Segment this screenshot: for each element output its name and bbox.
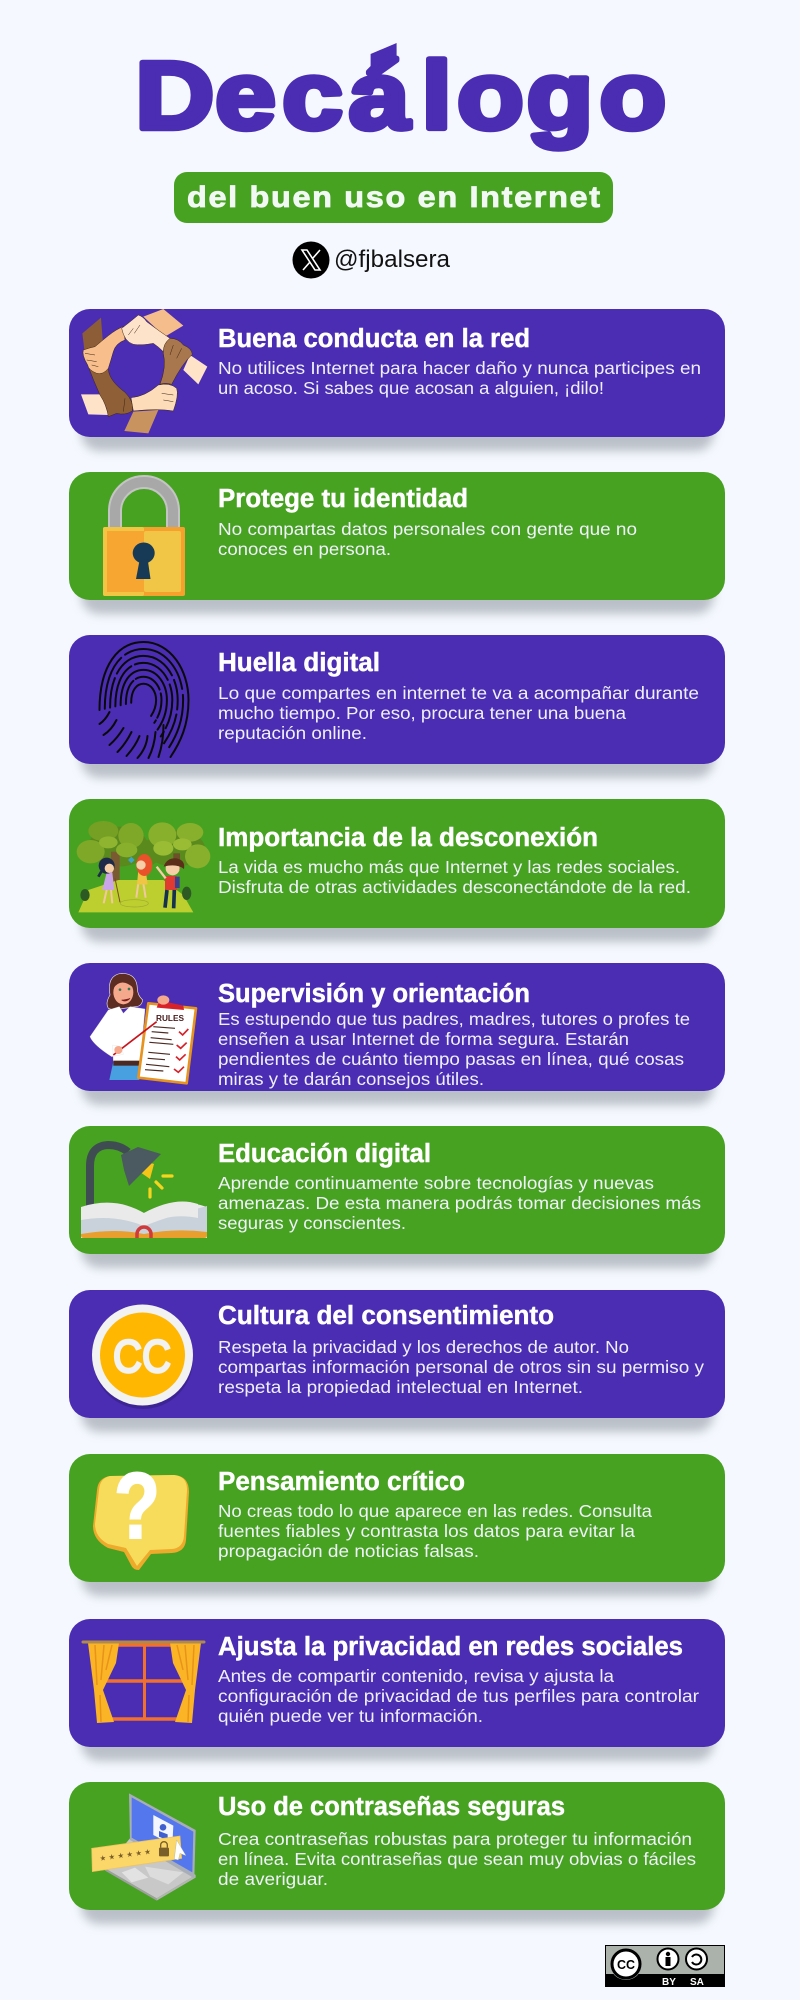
icon: children outdoors [77, 821, 210, 912]
body text [218, 1829, 696, 1889]
license badge: CC BY-SA [605, 1946, 725, 1988]
heading: Cultura del consentimiento [218, 1302, 554, 1330]
card 6: Educación digital [69, 1126, 725, 1268]
card 3: Huella digital [69, 635, 725, 778]
body text: Lo que compartes en internet te va a acompañar durante [218, 683, 699, 703]
card 10: Uso de contraseñas seguras [69, 1782, 725, 1924]
heading: Pensamiento crítico [218, 1468, 465, 1496]
body text [218, 519, 637, 559]
license badge: CC BY-SA: BY [662, 1977, 676, 1988]
body text: Crea contraseñas robustas para proteger tu información [218, 1829, 692, 1849]
heading: Importancia de la desconexión [218, 824, 598, 852]
body text: quién puede ver tu información. [218, 1706, 483, 1726]
body text [218, 1337, 704, 1397]
card 1: Buena conducta en la red [69, 309, 725, 451]
body text: No compartas datos personales con gente que no [218, 519, 637, 539]
body text [218, 683, 699, 743]
card 7: Cultura del consentimiento [69, 1290, 725, 1432]
body text [218, 1666, 699, 1726]
subtitle pill [174, 172, 613, 223]
body text: Disfruta de otras actividades desconectándote de la red. [218, 877, 691, 897]
body text: compartas información personal de otros sin su permiso y [218, 1357, 704, 1377]
icon: laptop with password bar [92, 1793, 196, 1901]
body text: pendientes de cuánto tiempo pasas en línea, qué cosas [218, 1049, 684, 1069]
body text: Respeta la privacidad y los derechos de autor. No [218, 1337, 629, 1357]
heading: Huella digital [218, 649, 380, 677]
author handle [292, 242, 451, 278]
body text [218, 1009, 690, 1089]
heading: Buena conducta en la red [218, 325, 530, 353]
body text: Aprende continuamente sobre tecnologías y nuevas [218, 1173, 654, 1193]
body text: fuentes fiables y contrasta los datos para evitar la [218, 1521, 635, 1541]
body text: enseñen a usar Internet de forma segura. Estarán [218, 1029, 629, 1049]
body text: La vida es mucho más que Internet y las redes sociales. [218, 857, 680, 877]
icon: laptop with password bar: ★★★★★★ [99, 1847, 152, 1863]
title: Decálogo [135, 42, 666, 149]
icon: question speech bubble: ? [114, 1453, 160, 1558]
body text [218, 1173, 701, 1233]
card 5: Supervisión y orientación [69, 963, 725, 1105]
card 2: Protege tu identidad [69, 472, 725, 614]
body text: conoces en persona. [218, 539, 391, 559]
body text: Antes de compartir contenido, revisa y ajusta la [218, 1666, 614, 1686]
body text: Es estupendo que tus padres, madres, tutores o profes te [218, 1009, 690, 1029]
icon: lamp and open book [81, 1145, 207, 1238]
body text: No utilices Internet para hacer daño y nunca participes en [218, 358, 701, 378]
icon: creative commons coin [92, 1304, 193, 1409]
body text [218, 857, 691, 897]
license badge: CC BY-SA: CC [617, 1957, 636, 1972]
icon: teacher with rules clipboard: RULES [156, 1014, 185, 1023]
heading: Supervisión y orientación [218, 980, 530, 1008]
body text: mucho tiempo. Por eso, procura tener una buena [218, 703, 626, 723]
body text: configuración de privacidad de tus perfiles para controlar [218, 1686, 699, 1706]
body text: reputación online. [218, 723, 367, 743]
body text: propagación de noticias falsas. [218, 1541, 479, 1561]
icon: creative commons coin: CC [113, 1331, 171, 1382]
body text: No creas todo lo que aparece en las redes. Consulta [218, 1501, 652, 1521]
card 4: Importancia de la desconexión [69, 799, 725, 942]
license badge: CC BY-SA: SA [690, 1977, 704, 1988]
body text: miras y te darán consejos útiles. [218, 1069, 484, 1089]
heading: Protege tu identidad [218, 485, 468, 513]
icon: question speech bubble [93, 1453, 189, 1570]
icon: fingerprint [100, 642, 188, 758]
body text: seguras y conscientes. [218, 1213, 406, 1233]
icon: joined hands [81, 309, 207, 433]
card 8: Pensamiento crítico [69, 1453, 725, 1596]
author handle: @fjbalsera [334, 246, 451, 273]
body text: de averiguar. [218, 1869, 328, 1889]
body text: un acoso. Si sabes que acosan a alguien, ¡dilo! [218, 378, 604, 398]
body text [218, 1501, 652, 1561]
body text: amenazas. De esta manera podrás tomar decisiones más [218, 1193, 701, 1213]
icon: padlock [103, 482, 185, 596]
subtitle pill: del buen uso en Internet [187, 180, 600, 214]
body text [218, 358, 701, 398]
heading: Ajusta la privacidad en redes sociales [218, 1633, 683, 1661]
icon: window with curtains [83, 1642, 204, 1723]
body text: respeta la propiedad intelectual en Internet. [218, 1377, 583, 1397]
card 9: Ajusta la privacidad en redes sociales [69, 1619, 725, 1761]
heading: Uso de contraseñas seguras [218, 1793, 565, 1821]
icon: teacher with rules clipboard [90, 973, 196, 1083]
heading: Educación digital [218, 1140, 431, 1168]
body text: en línea. Evita contraseñas que sean muy obvias o fáciles [218, 1849, 696, 1869]
